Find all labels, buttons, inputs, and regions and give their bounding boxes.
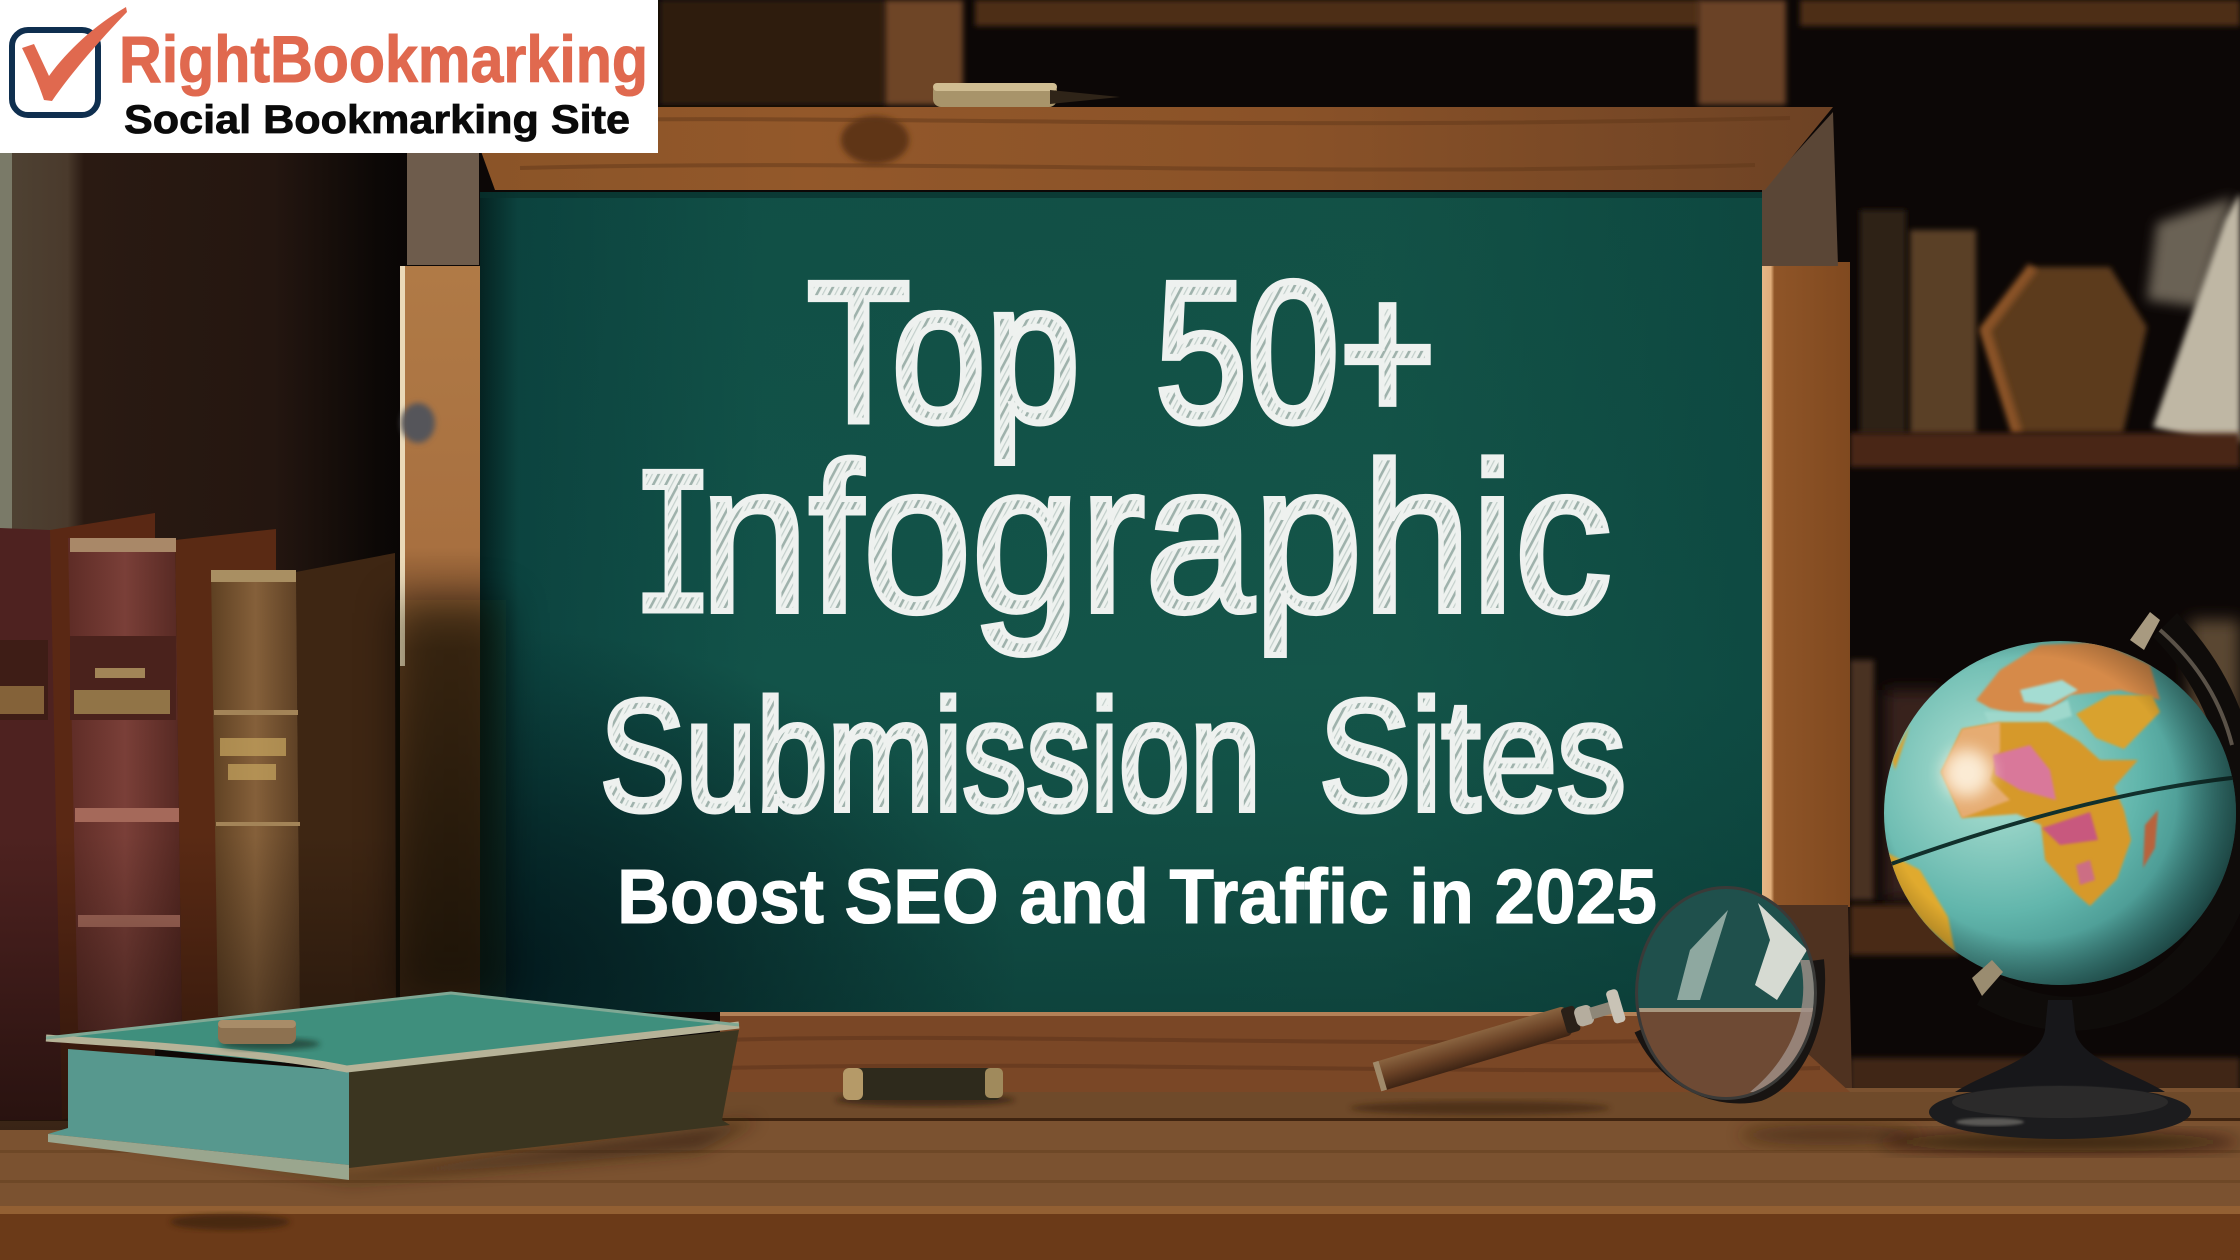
shadow at foot of books bbox=[0, 540, 400, 1130]
chalkboard surface bbox=[480, 192, 1762, 1012]
chalk heading: Submission Sites: Sites bbox=[1319, 668, 1626, 844]
globe bbox=[1880, 612, 2240, 1139]
magnifying glass bbox=[1372, 880, 1826, 1108]
green book lying flat bbox=[46, 993, 760, 1182]
logo tagline: Social Bookmarking Site bbox=[124, 98, 630, 142]
chalk eraser on table bbox=[835, 1068, 1015, 1106]
subtitle: Boost SEO and Traffic in 2025 bbox=[617, 854, 1657, 940]
frame: left post bbox=[400, 266, 480, 1006]
book 3 bbox=[211, 553, 396, 1020]
globe sphere bbox=[1880, 640, 2240, 990]
continents bbox=[1886, 642, 2160, 952]
lens bbox=[1630, 880, 1826, 1108]
logo wordmark: RightBookmarking bbox=[119, 22, 648, 96]
icon: checkbox bbox=[12, 7, 127, 115]
globe arc stand bbox=[1985, 625, 2240, 1014]
frame: right post bbox=[1760, 262, 1850, 907]
chalk holder clip on top of frame bbox=[933, 83, 1120, 107]
chalk heading: Infographic: nfographic bbox=[700, 419, 1612, 656]
chalk heading: Top 50+ bbox=[807, 241, 1436, 464]
equator line bbox=[1891, 777, 2240, 864]
book 1 bbox=[0, 513, 155, 1120]
frame: bottom bar bbox=[720, 1012, 1850, 1092]
chalk heading: Submission Sites: Submission bbox=[600, 668, 1261, 844]
globe pins bbox=[2130, 612, 2160, 650]
book 2 bbox=[68, 529, 276, 1040]
frame: top bar bbox=[465, 107, 1833, 190]
wooden table bbox=[0, 1088, 2240, 1260]
globe base bbox=[1929, 1000, 2191, 1139]
right shelf with blurred books bbox=[1850, 193, 2240, 1092]
chalk heading: Top 50+: 50+ bbox=[1155, 241, 1436, 464]
chalk heading: Top 50+: Top bbox=[807, 241, 1080, 464]
chalkboard frame bbox=[400, 107, 1852, 1092]
logo panel bbox=[0, 0, 658, 153]
chalk piece on book bbox=[218, 1020, 320, 1050]
upright old books bbox=[0, 513, 506, 1130]
handle bbox=[1372, 988, 1626, 1093]
chalk heading: Infographic: I bbox=[630, 435, 716, 675]
